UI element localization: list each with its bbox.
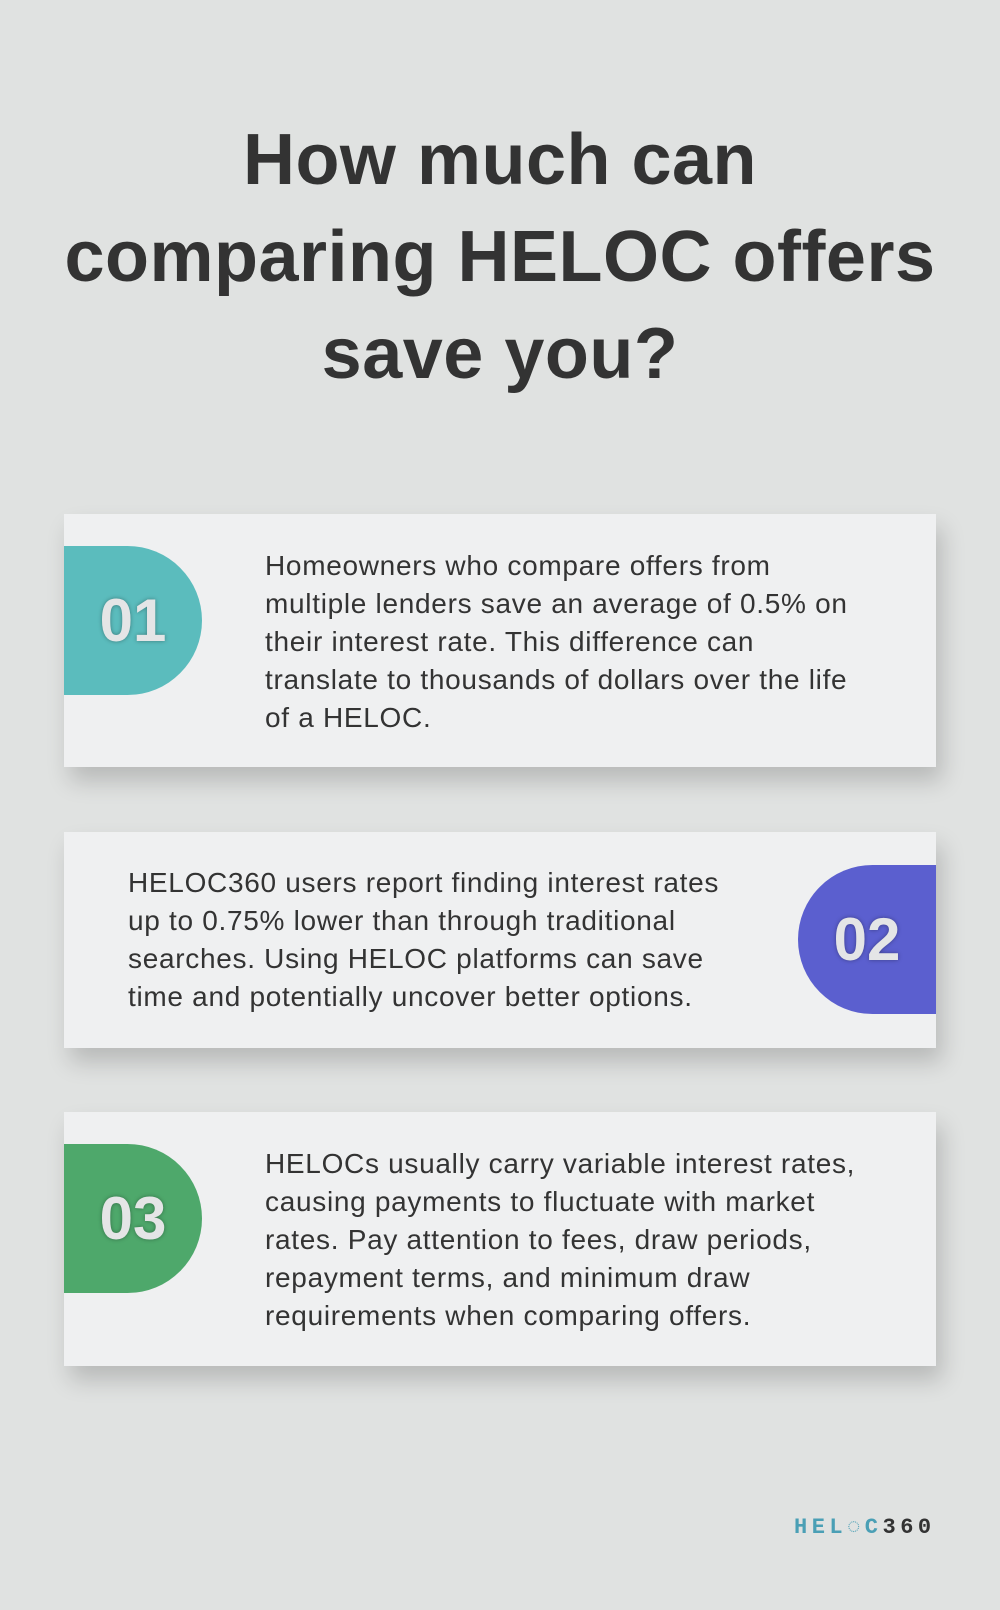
panel: 01 [64, 514, 936, 767]
badge 01 [64, 546, 202, 695]
text 03: rates. Pay attention to fees, draw periods, [265, 1224, 812, 1255]
panel: 03 [64, 1112, 936, 1366]
text 03: causing payments to fluctuate with market [265, 1186, 815, 1217]
text 01 [265, 550, 848, 733]
text 02: up to 0.75% lower than through traditional [128, 905, 676, 936]
text 02: HELOC360 users report finding interest rates [128, 867, 719, 898]
text 01: multiple lenders save an average of 0.5% on [265, 588, 848, 619]
badge 02: 02 [834, 906, 900, 973]
text 02: searches. Using HELOC platforms can save [128, 943, 704, 974]
text 01: Homeowners who compare offers from [265, 550, 771, 581]
title: save you? [322, 314, 678, 394]
badge 02 [798, 865, 936, 1014]
text 03: repayment terms, and minimum draw [265, 1262, 750, 1293]
title: How much can [243, 120, 757, 200]
text 01: their interest rate. This difference can [265, 626, 754, 657]
title [64, 120, 936, 394]
text 03: HELOCs usually carry variable interest rates, [265, 1148, 855, 1179]
text 01: translate to thousands of dollars over the life [265, 664, 847, 695]
badge 03 [64, 1144, 202, 1293]
text 01: of a HELOC. [265, 702, 431, 733]
panel: 02 [64, 832, 936, 1048]
title: comparing HELOC offers [64, 217, 936, 297]
badge 03: 03 [100, 1185, 166, 1252]
text 02: time and potentially uncover better options. [128, 981, 693, 1012]
text 03 [265, 1148, 855, 1331]
text 02 [128, 867, 719, 1012]
logo: HEL◌C360 [794, 1515, 936, 1540]
text 03: requirements when comparing offers. [265, 1300, 751, 1331]
badge 01: 01 [100, 587, 166, 654]
